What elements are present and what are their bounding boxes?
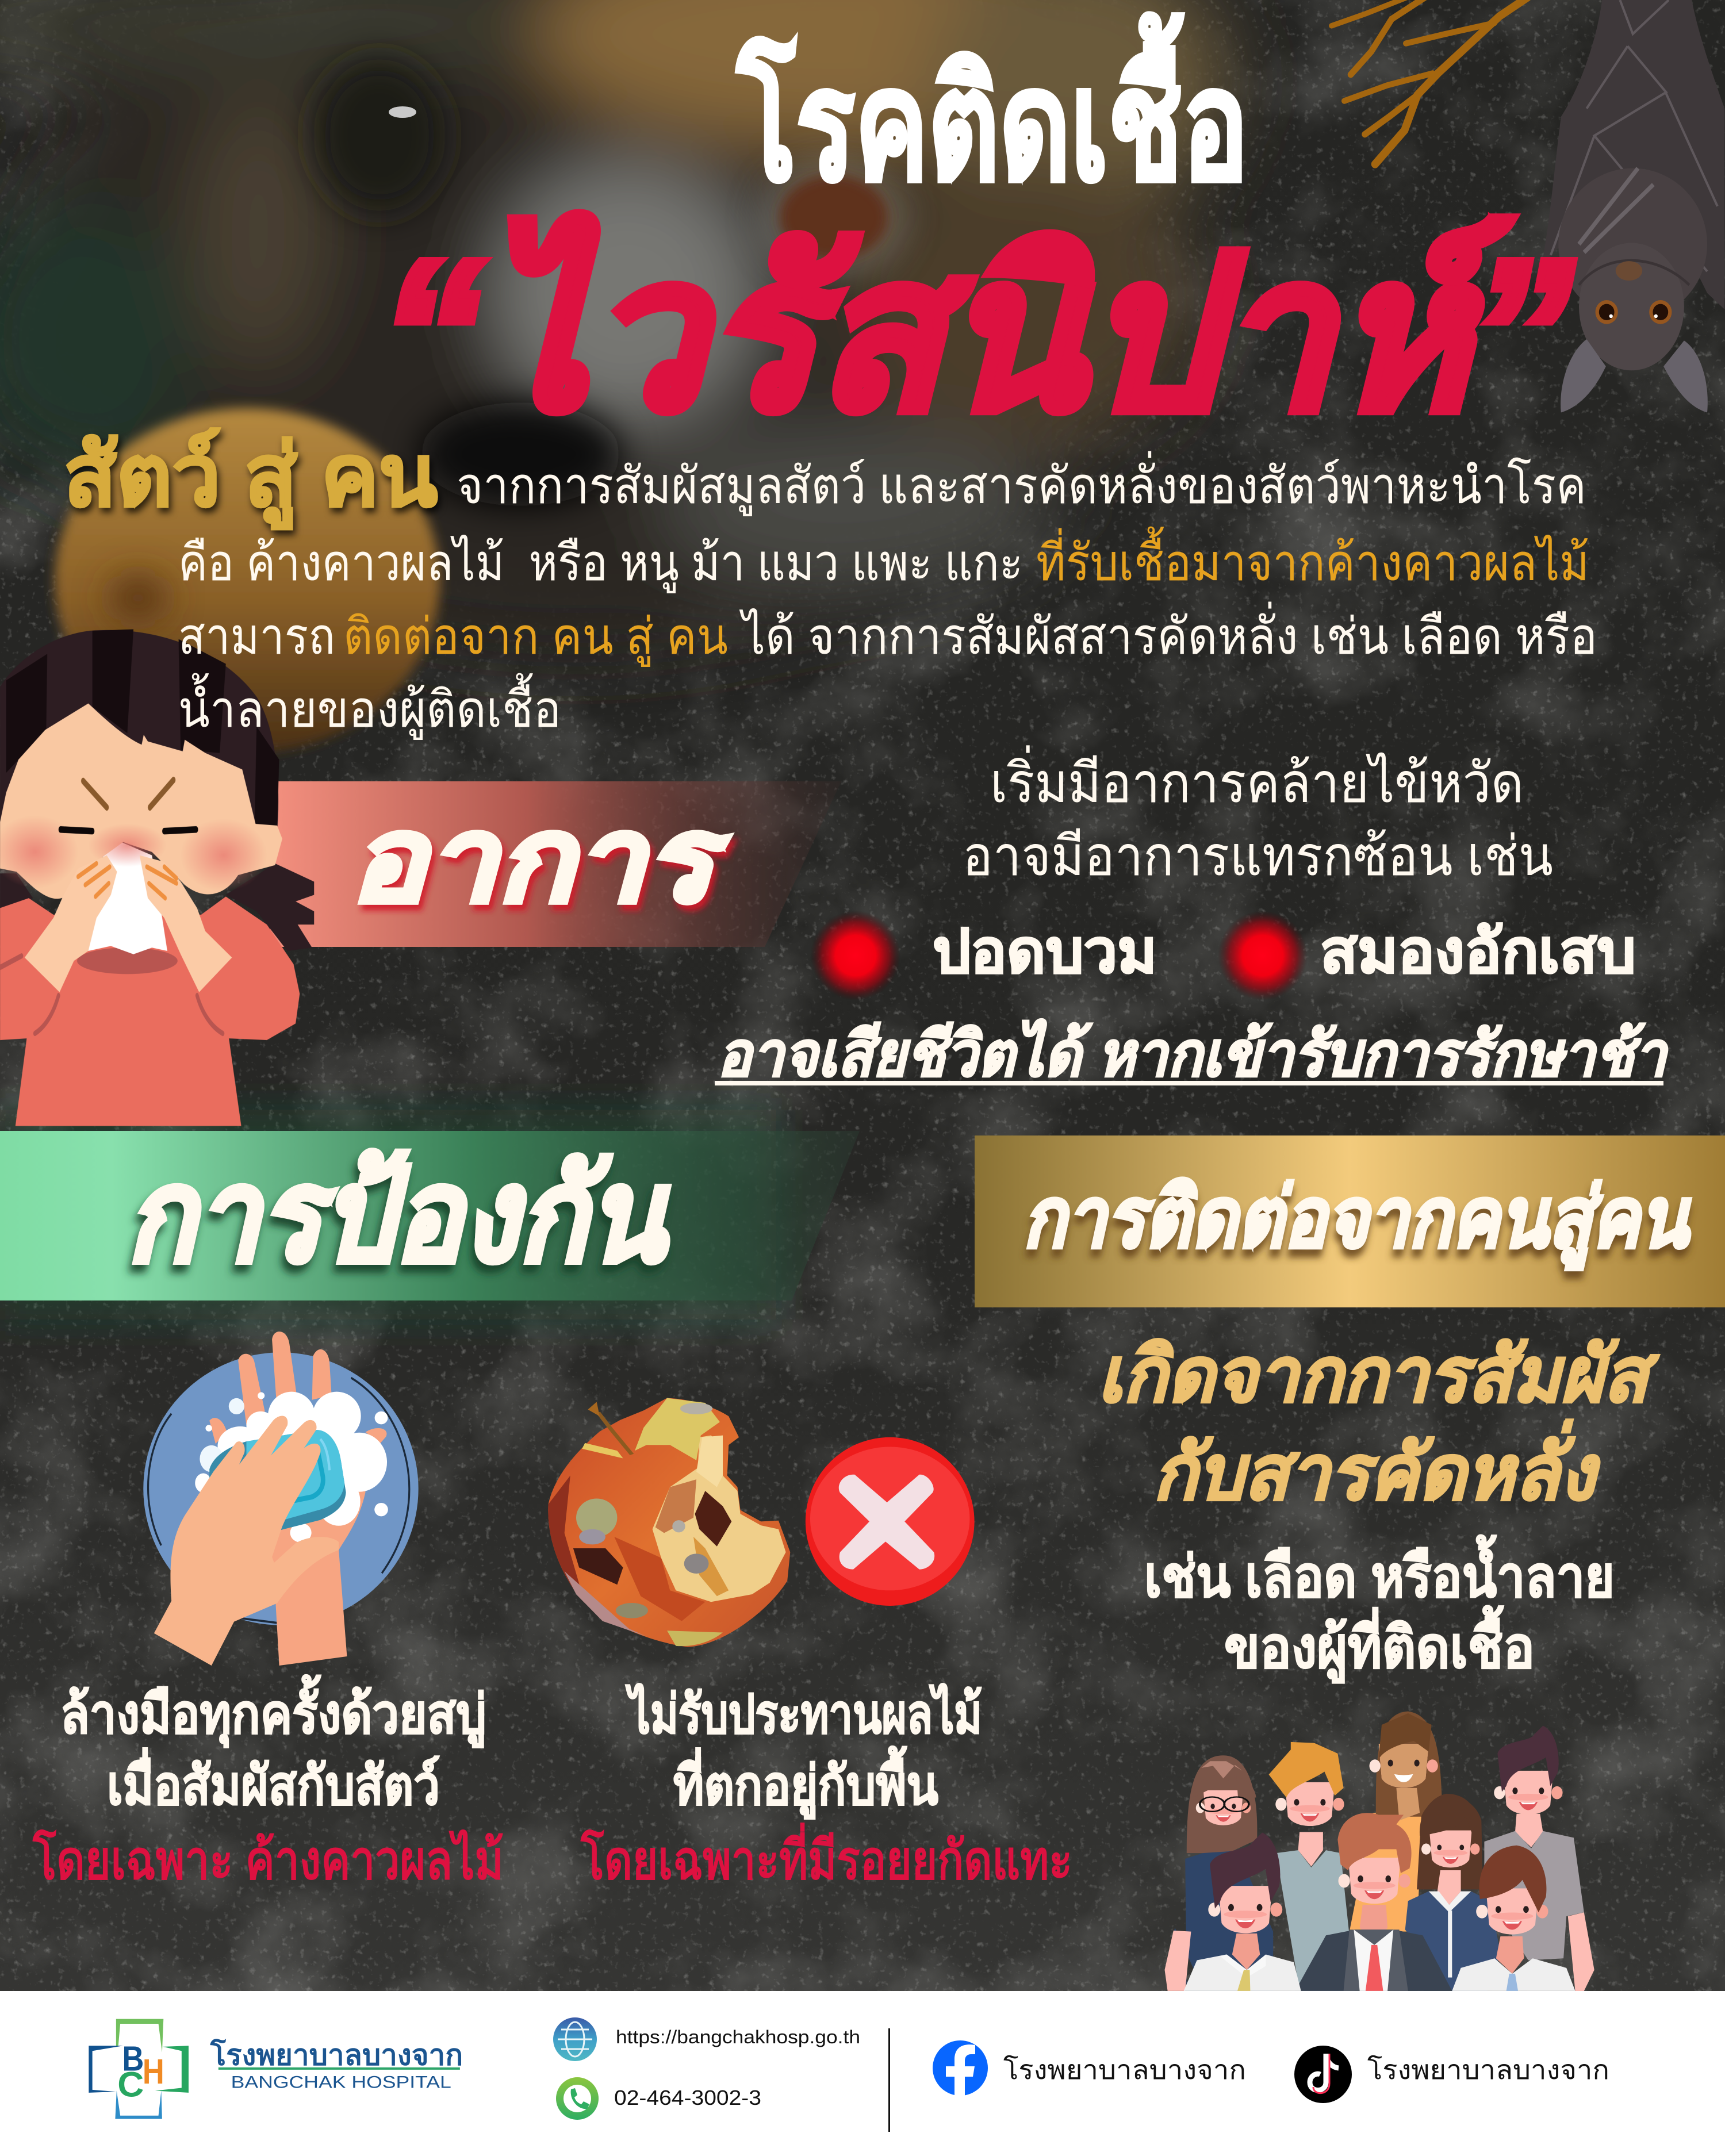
transmission description: ของผู้ที่ติดเชื้อ [1224,1605,1535,1683]
intro text block: น้ำลายของผู้ติดเชื้อ [178,673,561,740]
caption: wash hands: เมื่อสัมผัสกับสัตว์ [107,1747,440,1816]
complication: encephalitis: สมองอักเสบ [1320,918,1636,985]
divider [888,2028,890,2132]
intro text block: ได้ จากการสัมผัสสารคัดหลั่ง เช่น เลือด หรือ [739,601,1597,665]
green glow around prevention banner [0,1110,776,1319]
phone: 02-464-3002-3 [614,2086,761,2109]
symptoms description: เริ่มมีอาการคล้ายไข้หวัด [990,745,1524,814]
intro text block [64,427,1597,740]
hospital logo: โรงพยาบาลบางจาก [210,2038,463,2071]
transmission description [1098,1333,1659,1683]
hospital logo [89,2019,463,2119]
footer panel [0,1991,1725,2156]
caption: wash hands: ล้างมือทุกครั้งด้วยสบู่ [60,1674,486,1748]
banner: symptoms [270,781,841,947]
symptoms description [963,745,1553,887]
banner: person to person [975,1135,1725,1307]
warning underlined: อาจเสียชีวิตได้ หากเข้ารับการรักษาช้า [717,1019,1669,1089]
hospital logo: H [143,2052,164,2091]
illustration: hanging bat [1535,0,1724,412]
caption: avoid fallen fruit [580,1683,1072,1890]
title: infectious disease: โรคติดเชื้อ [735,13,1248,212]
symptoms description: อาจมีอาการแทรกซ้อน เช่น [963,826,1553,887]
caption: wash hands: โดยเฉพาะ ค้างคาวผลไม้ [32,1829,504,1890]
complication: pneumonia [811,911,1157,1000]
intro text block: สามารถ [178,608,335,665]
complication: pneumonia: ปอดบวม [933,918,1157,985]
intro text block: คือ ค้างคาวผลไม้ หรือ หนู ม้า แมว แพะ แกะ [178,534,1023,593]
intro text block: สัตว์ สู่ คน [64,427,438,530]
banner: prevention [0,1131,860,1300]
hospital logo: B [122,2039,144,2078]
facebook [933,2040,1246,2096]
complication: encephalitis [1218,911,1636,1000]
hospital logo: BANGCHAK HOSPITAL [231,2072,451,2092]
transmission description: เช่น เลือด หรือน้ำลาย [1144,1534,1615,1609]
phone [556,2077,761,2120]
caption: avoid fallen fruit: โดยเฉพาะที่มีรอยยกัดแทะ [580,1822,1072,1890]
icon: red X button [806,1437,975,1606]
intro text block: ที่รับเชื้อมาจากค้างคาวผลไม้ [1036,527,1589,591]
caption: avoid fallen fruit: ที่ตกอยู่กับพื้น [673,1745,938,1820]
icon: rotten bitten apple [548,1398,790,1647]
title: Nipah virus: “ไวรัสนิปาห์” [379,212,1573,453]
website [553,2017,860,2061]
website: https://bangchakhosp.go.th [616,2027,860,2047]
blurred fruit bat photo behind the title [0,0,1225,753]
tiktok: โรงพยาบาลบางจาก [1367,2055,1609,2085]
illustration: group of people [1165,1712,1594,1991]
intro text block: จากการสัมผัสมูลสัตว์ และสารคัดหลั่งของสัตว์พาหะนำโรค [457,451,1586,516]
illustration: tree branch [1332,0,1528,164]
heading: prevention: การป้องกัน [126,1143,669,1288]
caption: avoid fallen fruit: ไม่รับประทานผลไม้ [625,1683,982,1744]
caption: wash hands [32,1674,504,1890]
facebook: โรงพยาบาลบางจาก [1003,2055,1246,2085]
tiktok [1294,2046,1609,2103]
icon: washing hands with soap [143,1332,419,1666]
intro text block: ติดต่อจาก คน สู่ คน [343,608,728,667]
illustration: sneezing person with tissue [0,629,314,1126]
hospital logo: C [117,2065,144,2104]
heading: symptoms: อาการ [350,794,730,926]
transmission description: เกิดจากการสัมผัส [1098,1333,1659,1417]
transmission description: กับสารคัดหลั่ง [1153,1420,1600,1515]
